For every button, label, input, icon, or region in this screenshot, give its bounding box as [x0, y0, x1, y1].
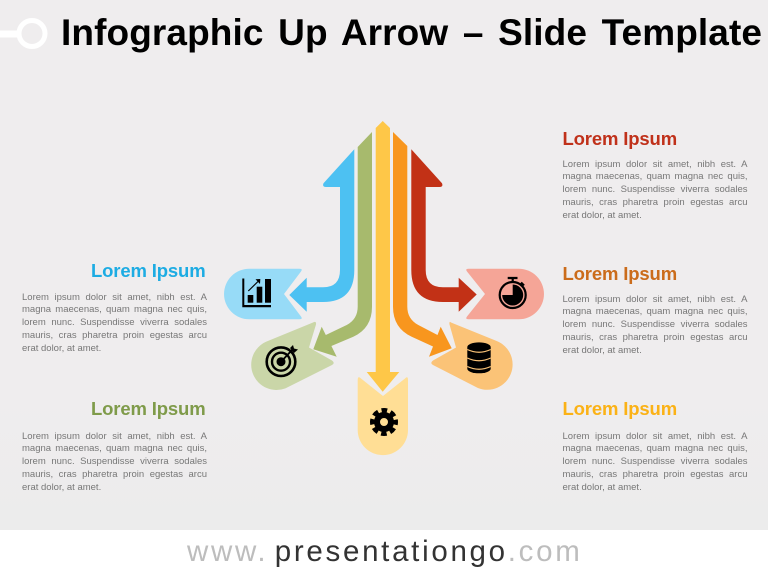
- text block: red: [562, 158, 748, 220]
- text block: yellow: erat dolor, at amet.: [562, 482, 642, 492]
- text block: red: Lorem ipsum dolor sit amet, nibh est. A: [562, 158, 748, 170]
- text block: blue: magna maecenas, quam magna nec quis,: [22, 304, 207, 315]
- pill: green: [251, 322, 334, 390]
- icon: database: [467, 342, 491, 373]
- arrow: green: [313, 132, 372, 357]
- heading: green: Lorem Ipsum: [91, 398, 206, 419]
- text block: blue: lorem nunc. Suspendisse viverra sodales: [22, 317, 207, 328]
- title: Infographic Up Arrow – Slide Template: [61, 12, 762, 53]
- arrow: orange: [393, 132, 452, 357]
- text block: dark orange: erat dolor, at amet.: [562, 344, 642, 356]
- text block: red: lorem nunc. Suspendisse viverra sodales: [562, 184, 748, 195]
- heading: yellow: Lorem Ipsum: [562, 398, 677, 418]
- text block: dark orange: magna maecenas, quam magna nec quis,: [562, 306, 748, 317]
- text block: yellow: mauris, cras pharetra proin egestas arcu: [562, 469, 748, 480]
- text block: red: erat dolor, at amet.: [562, 210, 642, 220]
- text block: blue: [22, 292, 207, 354]
- text block: green: Lorem ipsum dolor sit amet, nibh est. A: [22, 430, 207, 442]
- pill: blue: [224, 269, 302, 319]
- text block: green: [22, 430, 207, 492]
- text block: red: mauris, cras pharetra proin egestas arcu: [562, 197, 748, 208]
- text block: dark orange: mauris, cras pharetra proin egestas arcu: [562, 332, 748, 343]
- icon: stopwatch: [500, 278, 526, 308]
- text block: blue: erat dolor, at amet.: [22, 342, 101, 354]
- text block: green: lorem nunc. Suspendisse viverra sodales: [22, 456, 207, 467]
- heading: red: Lorem Ipsum: [562, 128, 677, 148]
- pill: orange: [431, 322, 513, 390]
- text block: yellow: [562, 430, 748, 492]
- text block: yellow: magna maecenas, quam magna nec quis,: [562, 443, 748, 454]
- heading: dark orange: Lorem Ipsum: [562, 262, 677, 284]
- text block: dark orange: lorem nunc. Suspendisse viverra sodales: [562, 319, 748, 330]
- pill: yellow: [358, 377, 408, 455]
- text block: blue: Lorem ipsum dolor sit amet, nibh est. A: [22, 292, 207, 302]
- text block: green: erat dolor, at amet.: [22, 482, 101, 492]
- arrow: red: [411, 149, 477, 312]
- icon: title ring logo: [0, 18, 48, 49]
- arrow: blue: [289, 149, 354, 312]
- icon: bar chart: [242, 278, 271, 307]
- icon: gear: [372, 410, 396, 434]
- text block: red: magna maecenas, quam magna nec quis,: [562, 171, 748, 182]
- text block: yellow: Lorem ipsum dolor sit amet, nibh est. A: [562, 430, 748, 442]
- icon: target: [267, 345, 298, 376]
- text block: dark orange: Lorem ipsum dolor sit amet, nibh est. A: [562, 294, 748, 304]
- text block: green: magna maecenas, quam magna nec quis,: [22, 443, 207, 454]
- footer website: www.presentationgo.com: [187, 535, 582, 568]
- text block: yellow: lorem nunc. Suspendisse viverra sodales: [562, 456, 748, 467]
- text block: dark orange: [562, 294, 748, 356]
- text block: blue: mauris, cras pharetra proin egestas arcu: [22, 330, 207, 341]
- pill: red: [466, 269, 544, 319]
- text block: green: mauris, cras pharetra proin egestas arcu: [22, 469, 207, 480]
- heading: blue: Lorem Ipsum: [91, 260, 206, 281]
- arrow: yellow: [367, 121, 399, 392]
